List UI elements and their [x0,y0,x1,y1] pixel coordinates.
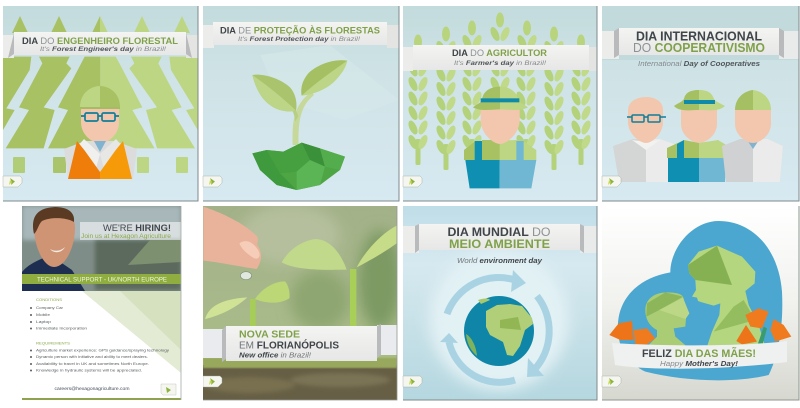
heading: FELIZ DIA DAS MÃES! [642,347,756,360]
heading: DIA DO ENGENHEIRO FLORESTAL [22,36,178,47]
icon: wheat stalks [407,12,592,170]
text block: requirements: Agriculture market experience: GPS guidance/spraying technology [36,348,169,352]
illustration: mother and child [609,221,791,380]
icon: logo tab [203,376,222,387]
text block: conditions: CONDITIONS [36,298,63,302]
heading: NOVA SEDE [239,328,300,340]
icon: logo tab [602,176,621,187]
text block: conditions: Laptop [36,320,51,324]
banner: job title: TECHNICAL SUPPORT - UK/NORTH EUROPE [37,276,168,284]
subheading: World environment day [457,258,543,265]
banner: we're hiring [80,222,181,240]
icon: logo tab [3,176,22,187]
icon: orange flowers [609,308,791,347]
icon: child silhouette [645,292,689,347]
icon: blue heart [618,221,782,380]
panel: forest protection day [203,6,399,201]
photo: smiling man [22,206,181,291]
text block: conditions [30,298,87,330]
panel: mother's day [602,206,799,400]
photo: finger and drop [203,207,261,280]
banner: environment day [403,224,597,253]
text block: requirements: Availability to travel in UK and sometimes North Europe. [36,362,149,366]
text block: requirements: Dynamic person with initiative and ability to meet dealers. [36,355,148,359]
panel: forest engineer's day [3,6,198,201]
panel: farmer's day [403,6,597,201]
icon: pine trees [3,16,198,173]
subheading: It's Farmer's day in Brazil! [454,60,546,67]
text block: conditions: Company Car [36,306,64,310]
banner: forest protection [203,22,399,48]
icon: engineer figure [64,86,137,179]
contact email: careers@hexagonagriculture.com [54,386,130,391]
subheading: Happy Mother's Day! [660,361,739,368]
banner: environment day: MEIO AMBIENTE [449,237,550,251]
banner: cooperatives [602,28,799,59]
panel: hiring poster [22,206,181,400]
icon: logo tab [403,176,422,187]
panel: day of cooperatives [602,6,799,201]
heading: DIA DE PROTEÇÃO ÀS FLORESTAS [220,26,380,36]
text block: conditions: Mobile [36,313,50,317]
subheading: International Day of Cooperatives [638,61,760,68]
banner: forest engineer [3,32,198,58]
subheading: Join us at Hexagon Agriculture [81,234,172,240]
icon: farmer figure [464,87,536,188]
banner: new office [203,324,397,362]
icon: mother silhouette [688,246,765,347]
subheading: It's Forest Protection day in Brazil! [238,36,360,43]
icon: person with hat [667,90,728,182]
heading: DIA MUNDIAL DO [448,225,550,239]
subheading: New office in Brazil! [239,352,311,360]
panel: new office photo [203,205,402,400]
heading: DIA DO AGRICULTOR [452,48,547,59]
icon: globe [464,296,534,366]
text block: requirements [30,342,169,372]
icon: logo tab [602,376,621,387]
panel shadow [3,6,198,201]
text block: conditions: Immediate Incorporation [36,326,87,330]
photo: soil [203,358,397,400]
icon: sprout [252,60,347,190]
text block: requirements: Knowledge in hydraulic systems will be appreciated. [36,368,142,372]
banner: new office: EM FLORIANÓPOLIS [239,338,339,352]
icon: person with glasses [613,97,680,182]
banner: cooperatives: DO COOPERATIVISMO [633,41,765,55]
icon: logo tab [203,176,222,187]
banner: farmer [403,45,597,71]
panel: world environment day [403,206,597,400]
icon: circular arrows [440,270,549,382]
text block: requirements: REQUIREMENTS [36,342,71,346]
photo: small seedling [205,282,290,326]
icon: logo tab [161,384,176,395]
subheading: It's Forest Engineer's day in Brazil! [40,46,166,53]
icon: logo tab [403,376,422,387]
heading: WE'RE HIRING! [103,223,171,233]
photo: large seedling [282,226,397,327]
heading: DIA INTERNACIONAL [636,30,762,44]
banner: mother's day [612,341,787,369]
icon: person with cap [722,90,783,182]
banner: job title [22,274,181,284]
